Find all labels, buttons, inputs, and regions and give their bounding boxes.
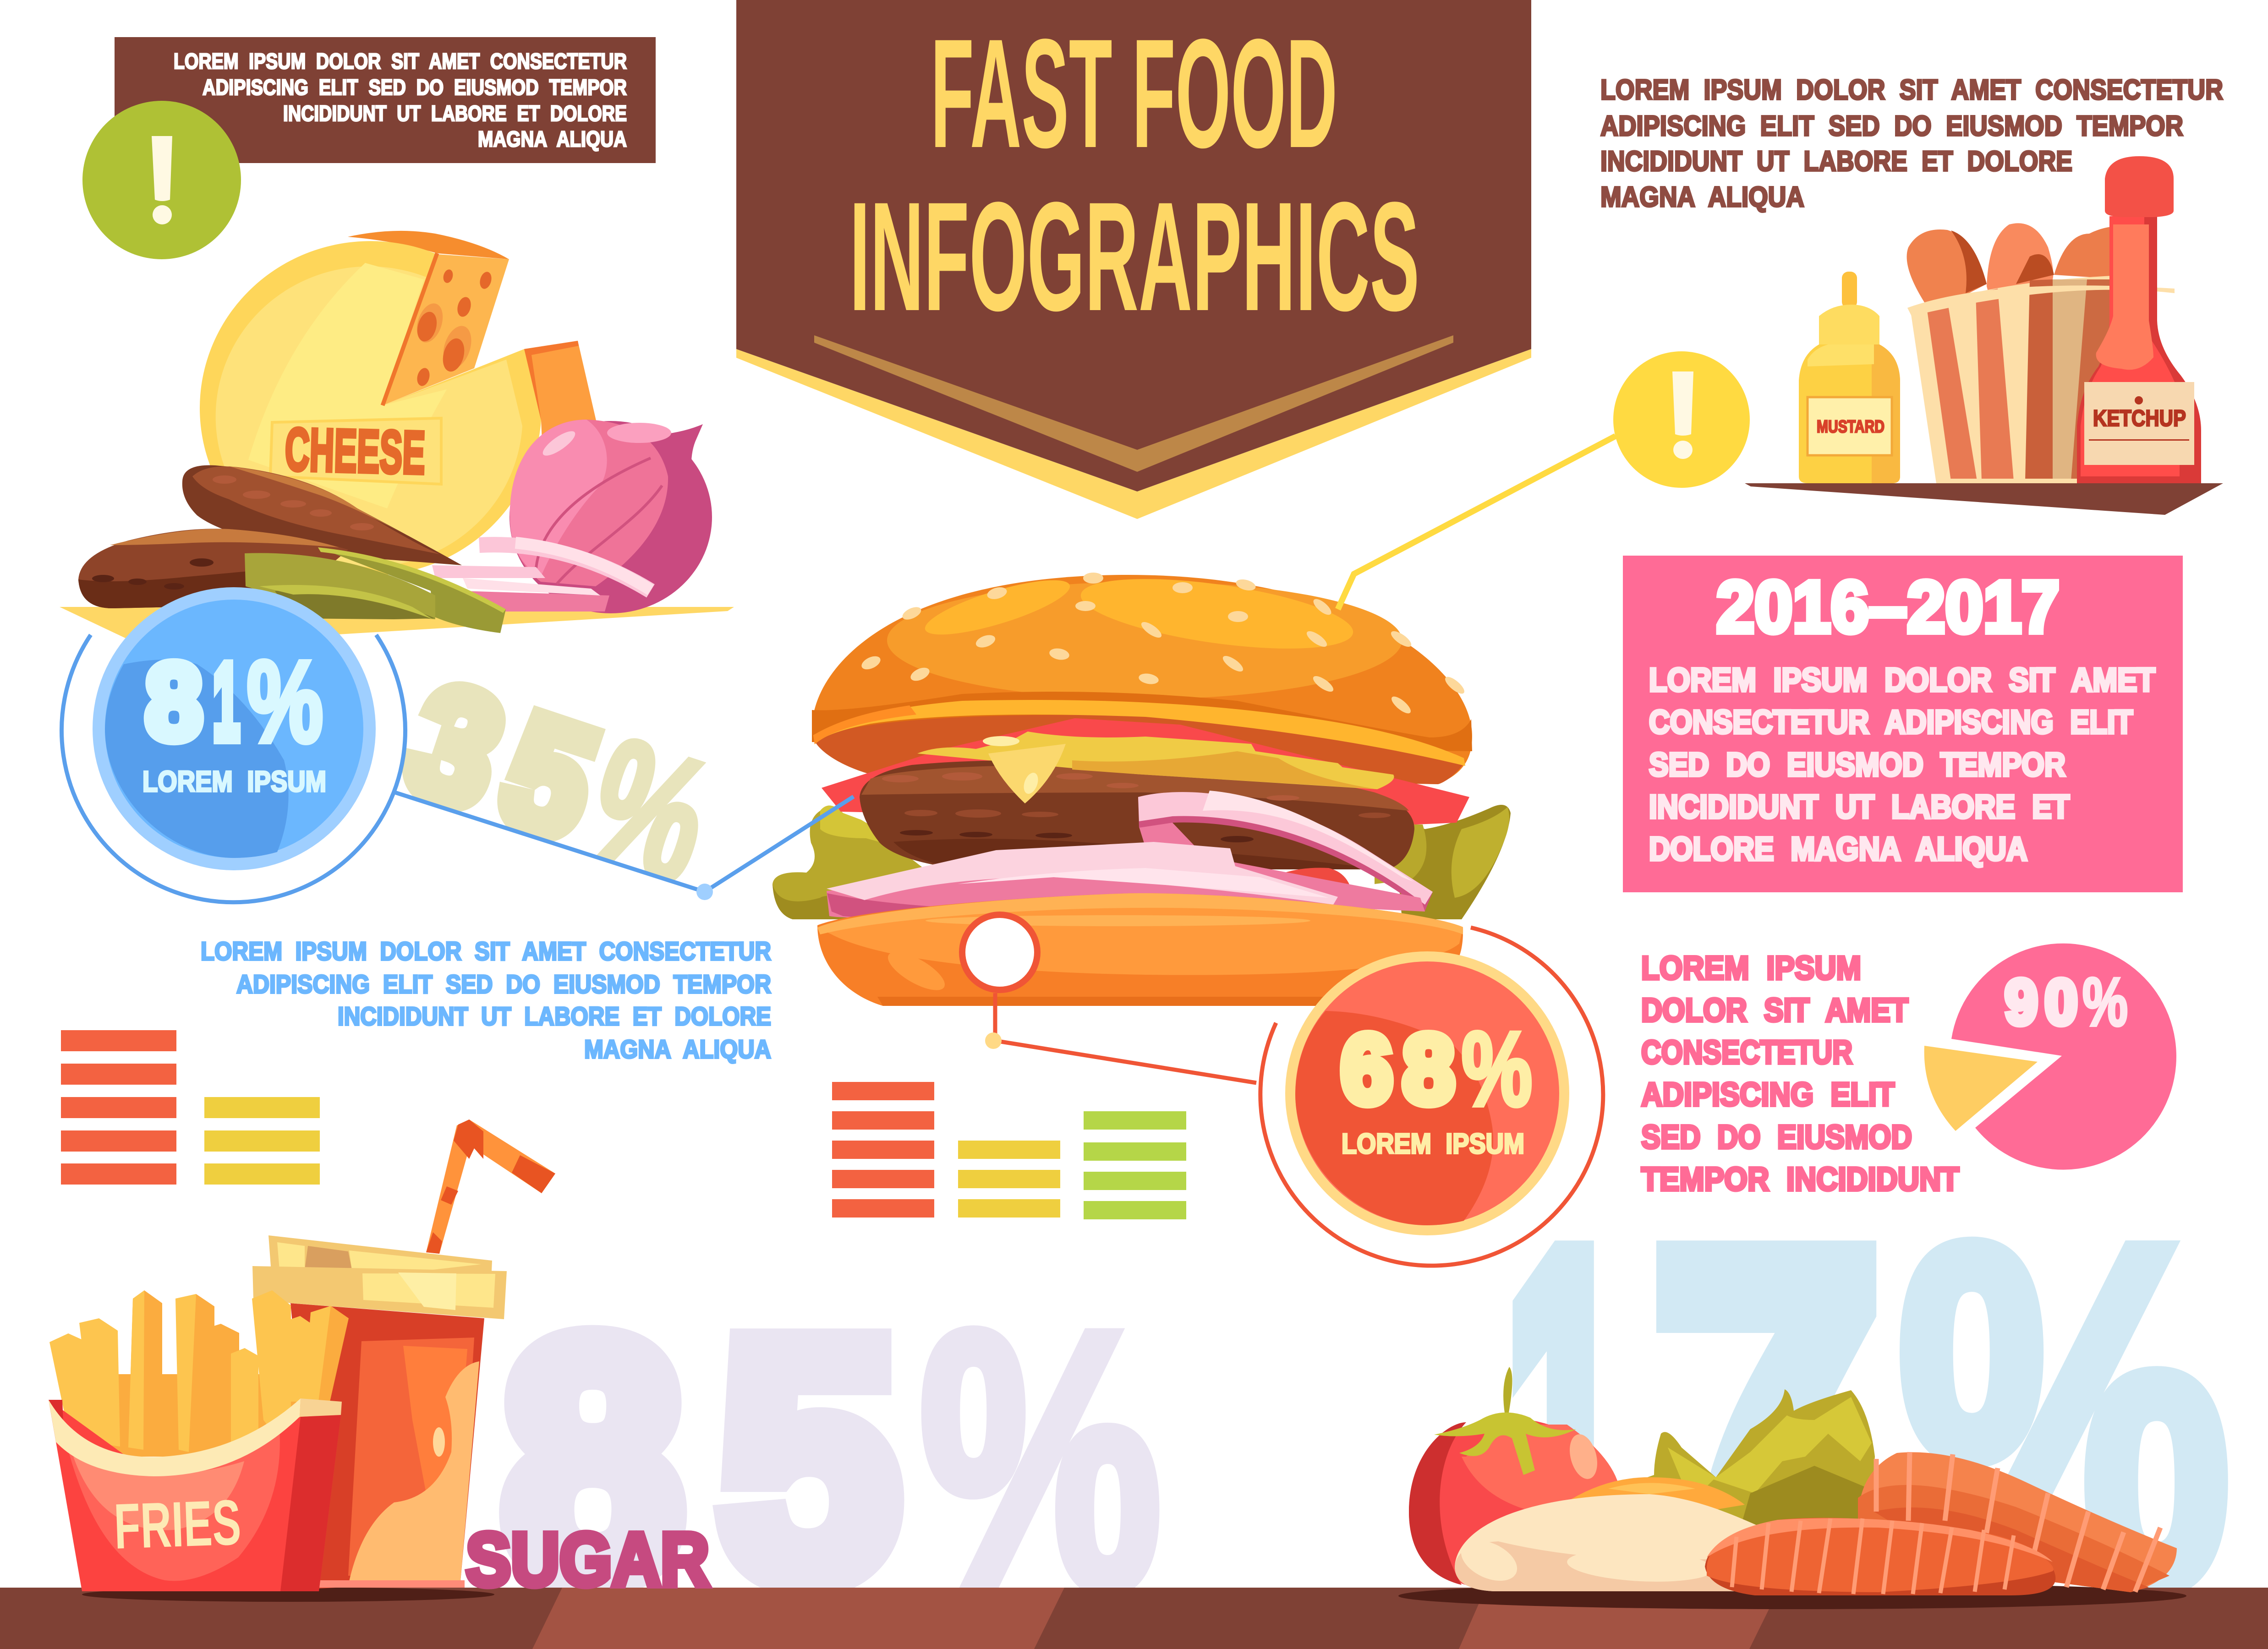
tomato bbox=[822, 718, 1469, 824]
pink paragraph: DOLOR SIT AMET bbox=[1641, 992, 1908, 1029]
bar chart: left bbox=[61, 1030, 320, 1185]
pink paragraph: ADIPISCING ELIT bbox=[1641, 1076, 1895, 1113]
cheese label: CHEESE bbox=[284, 415, 426, 486]
pie value: 0 bbox=[2045, 967, 2077, 1037]
brown note panel bbox=[115, 37, 656, 163]
yellow connector line bbox=[1338, 436, 1616, 609]
shelf bbox=[1745, 483, 2223, 515]
chicken bucket bbox=[1907, 275, 2175, 483]
value: 81%: % bbox=[247, 637, 323, 766]
note text bbox=[174, 49, 627, 152]
lid bbox=[252, 1235, 507, 1319]
note text: LOREM IPSUM DOLOR SIT AMET CONSECTETUR bbox=[174, 49, 627, 74]
ketchup bottle: KETCHUP bbox=[2093, 405, 2186, 431]
value: 68%: 8 bbox=[1403, 1015, 1454, 1123]
pink paragraph: SED DO EIUSMOD bbox=[1641, 1119, 1912, 1156]
background number: 35%: 5 bbox=[483, 680, 615, 875]
caption: LOREM IPSUM bbox=[1342, 1128, 1524, 1160]
onion slices bbox=[827, 791, 1433, 918]
value: 81%: 8 bbox=[146, 641, 202, 762]
panel text: DOLORE MAGNA ALIQUA bbox=[1649, 831, 2027, 868]
illustration: tomato, lettuce, chicken, salmon bbox=[1409, 1367, 2177, 1595]
salmon front bbox=[1705, 1518, 2055, 1595]
callout circle: 68% bbox=[1260, 928, 1603, 1266]
background number: 85%: 5 bbox=[720, 1271, 898, 1649]
tomato bbox=[1409, 1367, 1620, 1589]
straw bbox=[426, 1119, 555, 1254]
title banner bbox=[736, 0, 1531, 519]
top right paragraph bbox=[1600, 74, 2223, 213]
background number: 35% bbox=[402, 681, 707, 880]
note text: INCIDIDUNT UT LABORE ET DOLORE bbox=[283, 102, 627, 126]
fries box bbox=[49, 1398, 342, 1591]
onion slices bbox=[432, 543, 651, 612]
pink paragraph: CONSECTETUR bbox=[1641, 1034, 1852, 1071]
top right paragraph: ADIPISCING ELIT SED DO EIUSMOD TEMPOR bbox=[1600, 110, 2183, 142]
cup bbox=[290, 1303, 484, 1589]
chicken breast with yolk bbox=[1455, 1477, 1808, 1591]
panel text: SED DO EIUSMOD TEMPOR bbox=[1649, 747, 2065, 783]
marker on burger with connector bbox=[962, 915, 1256, 1083]
panel text: INCIDIDUNT UT LABORE ET bbox=[1649, 789, 2070, 825]
mustard bottle bbox=[1799, 272, 1900, 483]
mustard bottle: MUSTARD bbox=[1817, 417, 1885, 437]
lettuce bbox=[1628, 1389, 1875, 1525]
patties bbox=[78, 465, 462, 608]
blue paragraph: ADIPISCING ELIT SED DO EIUSMOD TEMPOR bbox=[236, 970, 771, 999]
panel text: CONSECTETUR ADIPISCING ELIT bbox=[1649, 704, 2133, 741]
melted cheese bbox=[917, 732, 1394, 803]
illustration: fries bbox=[49, 1290, 349, 1591]
yellow table bbox=[60, 607, 734, 640]
pink paragraph bbox=[1641, 950, 1959, 1198]
illustration: cheese, patties, onion, pickles bbox=[60, 231, 734, 640]
panel text: LOREM IPSUM DOLOR SIT AMET bbox=[1649, 662, 2155, 699]
pickles bbox=[245, 547, 506, 633]
pink info panel bbox=[1623, 556, 2183, 892]
blue paragraph: MAGNA ALIQUA bbox=[584, 1035, 771, 1064]
pie value: % bbox=[2082, 963, 2128, 1040]
label: SUGAR: SUGAR bbox=[466, 1518, 709, 1601]
background number: 85%: 8 bbox=[504, 1271, 682, 1649]
ketchup bottle bbox=[2077, 156, 2201, 483]
illustration: burger bbox=[772, 566, 1511, 1006]
blue paragraph bbox=[201, 937, 771, 1064]
fries box label: FRIES bbox=[113, 1486, 242, 1562]
panel heading: 2016–2017 bbox=[1716, 566, 2060, 648]
panel text bbox=[1649, 662, 2155, 868]
cheese wheel bbox=[200, 231, 596, 575]
banner chevron bbox=[814, 335, 1453, 472]
callout circle: 81% bbox=[61, 587, 405, 902]
caption: LOREM IPSUM bbox=[142, 765, 326, 798]
pink paragraph: TEMPOR INCIDIDUNT bbox=[1641, 1161, 1959, 1198]
bottom bun bbox=[817, 893, 1463, 1006]
onion bbox=[509, 420, 712, 613]
background number: 35%: % bbox=[566, 700, 732, 922]
title banner: FAST FOOD bbox=[931, 6, 1337, 180]
note text: MAGNA ALIQUA bbox=[478, 127, 627, 152]
chicken drumsticks bbox=[1907, 223, 2126, 311]
icon: green exclamation bbox=[82, 101, 241, 259]
top right paragraph: MAGNA ALIQUA bbox=[1600, 181, 1804, 213]
illustration: soft drink bbox=[252, 1119, 555, 1589]
pink paragraph: LOREM IPSUM bbox=[1641, 950, 1861, 987]
value: 68%: 6 bbox=[1341, 1015, 1392, 1123]
mustard label bbox=[1808, 397, 1892, 455]
background number: 35%: 3 bbox=[389, 649, 523, 844]
value: 68%: % bbox=[1462, 1010, 1532, 1128]
beef patty bbox=[860, 760, 1414, 869]
ketchup label bbox=[2084, 382, 2194, 465]
floor bbox=[0, 1583, 2268, 1649]
blue connector line bbox=[394, 792, 854, 900]
top right paragraph: INCIDIDUNT UT LABORE ET DOLORE bbox=[1600, 146, 2072, 177]
blue paragraph: LOREM IPSUM DOLOR SIT AMET CONSECTETUR bbox=[201, 937, 771, 966]
blue paragraph: INCIDIDUNT UT LABORE ET DOLORE bbox=[338, 1002, 771, 1031]
illustration: condiments and chicken bucket bbox=[1745, 156, 2223, 515]
note text: ADIPISCING ELIT SED DO EIUSMOD TEMPOR bbox=[203, 76, 627, 100]
salmon back bbox=[1858, 1452, 2177, 1592]
lettuce bbox=[772, 805, 1511, 919]
pie value: 9 bbox=[2005, 967, 2038, 1037]
top bun bbox=[812, 566, 1472, 784]
value: 81%: 1 bbox=[213, 641, 240, 762]
icon: yellow exclamation bbox=[1613, 351, 1750, 488]
pie chart: 90% bbox=[1924, 944, 2176, 1170]
sesame seeds bbox=[860, 573, 1467, 716]
title banner: INFOGRAPHICS bbox=[849, 169, 1419, 343]
bar chart: centre bbox=[832, 1082, 1186, 1219]
cheese label bbox=[270, 415, 441, 486]
